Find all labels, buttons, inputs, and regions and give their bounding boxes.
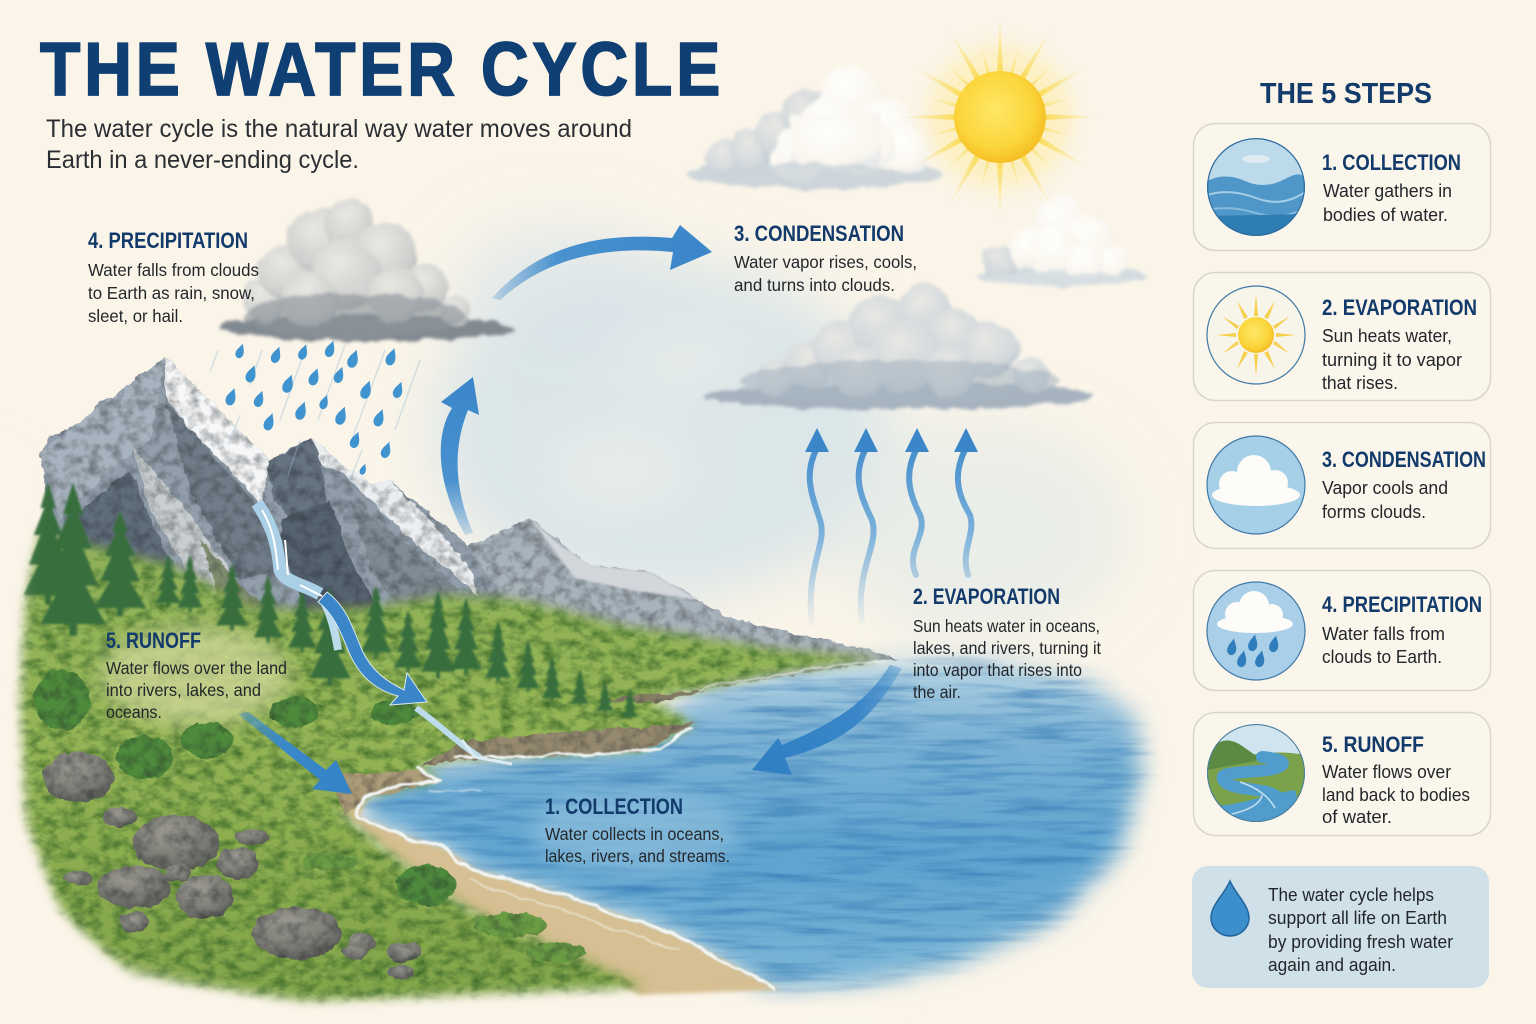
card: precipitation	[1194, 570, 1490, 690]
card: runoff: of water.	[1322, 807, 1392, 827]
callout	[1192, 866, 1489, 988]
rain	[210, 339, 420, 480]
icon: water drop	[1211, 881, 1249, 936]
label: runoff: oceans.	[106, 702, 162, 722]
card: precipitation: clouds to Earth.	[1322, 647, 1442, 667]
arrow: runoff over land	[238, 712, 352, 794]
label: condensation: 3. CONDENSATION	[734, 221, 904, 246]
label: runoff: into rivers, lakes, and	[106, 680, 261, 700]
label: evaporation	[913, 584, 1101, 702]
main mountains	[40, 357, 520, 660]
label: precipitation: to Earth as rain, snow,	[88, 283, 255, 303]
label: evaporation: 2. EVAPORATION	[913, 584, 1060, 609]
rocks	[43, 752, 421, 979]
label: evaporation: lakes, and rivers, turning it	[913, 638, 1101, 658]
subtitle	[46, 115, 632, 174]
label: condensation: Water vapor rises, cools,	[734, 252, 917, 272]
label: evaporation: the air.	[913, 682, 961, 702]
heading: the 5 steps: THE 5 STEPS	[1260, 78, 1432, 110]
card: evaporation: that rises.	[1322, 373, 1398, 393]
title: THE WATER CYCLE	[40, 27, 720, 111]
card: condensation: Vapor cools and	[1322, 478, 1448, 498]
far ridge snow	[530, 518, 700, 600]
card: condensation	[1194, 422, 1490, 548]
label: condensation	[734, 221, 917, 295]
card: evaporation: Sun heats water,	[1322, 326, 1452, 346]
bushes	[34, 670, 586, 962]
card: collection	[1194, 124, 1490, 250]
label: collection: lakes, rivers, and streams.	[545, 846, 730, 866]
card: runoff	[1194, 712, 1490, 836]
icon: sun	[1207, 286, 1305, 384]
label: collection: 1. COLLECTION	[545, 794, 683, 819]
card: evaporation	[1194, 272, 1490, 400]
label: precipitation	[88, 228, 259, 326]
card: collection: 1. COLLECTION	[1322, 150, 1461, 175]
label: condensation: and turns into clouds.	[734, 275, 895, 295]
label: evaporation: Sun heats water in oceans,	[913, 616, 1100, 636]
forest	[23, 482, 638, 719]
card: runoff: land back to bodies	[1322, 785, 1470, 805]
sand beach	[335, 795, 780, 995]
label: evaporation: into vapor that rises into	[913, 660, 1082, 680]
cloud: condensation	[705, 284, 1095, 409]
waterfall and stream	[257, 503, 512, 764]
callout: The water cycle helps	[1268, 885, 1434, 905]
sky wash	[430, 220, 1130, 640]
sun	[895, 12, 1105, 222]
label: precipitation: Water falls from clouds	[88, 260, 259, 280]
cloud: precipitation	[217, 199, 513, 341]
land	[20, 530, 885, 1002]
icon: river	[1207, 724, 1305, 830]
callout: again and again.	[1268, 955, 1396, 975]
card: evaporation: 2. EVAPORATION	[1322, 295, 1477, 320]
label: runoff: Water flows over the land	[106, 658, 287, 678]
label: collection: Water collects in oceans,	[545, 824, 724, 844]
label: collection	[530, 790, 740, 874]
rocky bank	[330, 690, 705, 815]
card: collection: Water gathers in	[1323, 181, 1452, 201]
arrow: evaporation to condensation	[492, 225, 712, 300]
cloud: top white	[687, 65, 943, 189]
callout: support all life on Earth	[1268, 908, 1447, 928]
label: precipitation: 4. PRECIPITATION	[88, 228, 248, 253]
arrow: river from mountain	[318, 592, 427, 705]
vapor arrowheads	[805, 428, 978, 452]
surf	[357, 660, 885, 988]
card: evaporation: turning it to vapor	[1322, 350, 1462, 370]
arrow: rising from mountains	[441, 377, 479, 535]
subtitle: Earth in a never-ending cycle.	[46, 146, 359, 174]
vapor arrows	[810, 448, 971, 625]
card: runoff: 5. RUNOFF	[1322, 732, 1424, 757]
label: runoff	[106, 628, 287, 722]
far ridge	[450, 518, 900, 690]
pale patch behind runoff text	[100, 626, 290, 726]
subtitle: The water cycle is the natural way water moves around	[46, 115, 632, 143]
landscape scene	[0, 357, 1142, 1024]
arrow: evaporation down to sea	[752, 665, 902, 775]
card: runoff: Water flows over	[1322, 762, 1451, 782]
cloud: right white	[976, 196, 1148, 286]
card: precipitation: Water falls from	[1322, 624, 1445, 644]
sea	[359, 662, 1142, 990]
label: precipitation: sleet, or hail.	[88, 306, 183, 326]
icon: water	[1207, 138, 1305, 236]
card: collection: bodies of water.	[1323, 205, 1448, 225]
callout: by providing fresh water	[1268, 932, 1453, 952]
icon: rain cloud	[1207, 582, 1305, 680]
label: runoff: 5. RUNOFF	[106, 628, 201, 653]
card: condensation: 3. CONDENSATION	[1322, 447, 1486, 472]
card: condensation: forms clouds.	[1322, 502, 1426, 522]
icon: cloud	[1207, 436, 1305, 534]
fade edge	[0, 430, 900, 1024]
card: precipitation: 4. PRECIPITATION	[1322, 592, 1482, 617]
